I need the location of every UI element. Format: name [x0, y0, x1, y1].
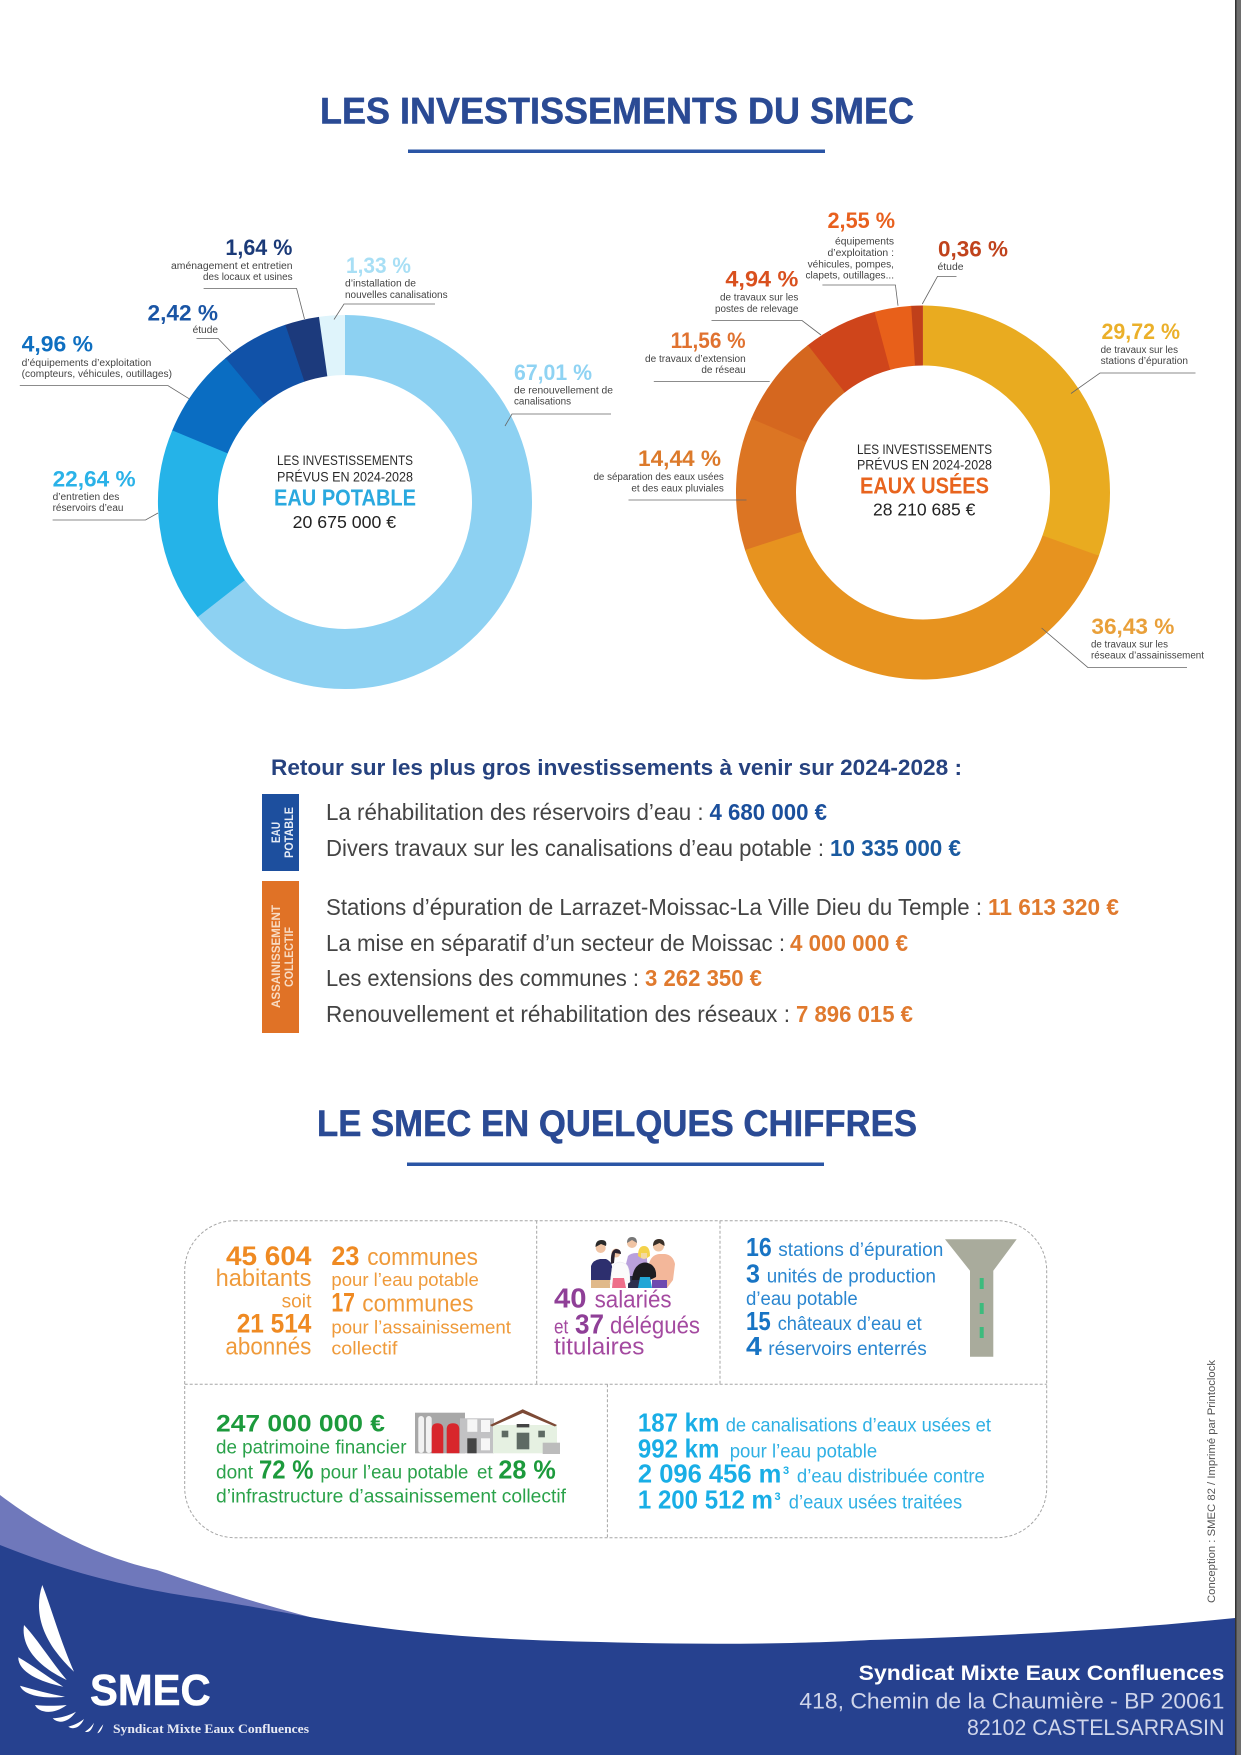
icon: route: [945, 1239, 1017, 1357]
logo: SMEC: Syndicat Mixte Eaux Confluences: [113, 1721, 309, 1736]
chart: donut eaux usées: [703, 272, 1143, 713]
label: 11,56 %: de travaux d’extension: [645, 354, 746, 365]
icon: usine et maison: [415, 1409, 560, 1454]
donut centre text: eaux usées: LES INVESTISSEMENTS: [857, 442, 992, 457]
label: 67,01 %: [505, 360, 613, 426]
badge: eau potable: EAU: [269, 822, 283, 843]
logo: SMEC: SMEC: [90, 1666, 211, 1715]
footer wave: light band: [0, 1495, 345, 1640]
label: 22,64 %: [53, 466, 158, 520]
stat: communes: collectif: [331, 1337, 398, 1358]
stat: habitants et abonnés: abonnés: [225, 1333, 311, 1360]
list: eau potable: Divers travaux sur les canalisations d’eau potable :: [326, 835, 824, 861]
label: 29,72 %: [1071, 319, 1196, 394]
title: le SMEC en quelques chiffres: [317, 1103, 917, 1166]
label: 29,72 %: stations d’épuration: [1101, 356, 1188, 367]
stat: canalisations et volumes: 1 200 512 m: [638, 1484, 773, 1514]
donut centre text: eaux usées: [857, 442, 992, 520]
label: 2,55 %: véhicules, pompes,: [808, 260, 894, 270]
badge: assainissement collectif: COLLECTIF: [282, 927, 296, 987]
label: 4,96 %: 4,96 %: [22, 332, 93, 356]
label: 1,64 %: aménagement et entretien: [171, 261, 293, 272]
label: 1,33 %: 1,33 %: [346, 253, 411, 278]
label: 67,01 %: canalisations: [514, 396, 571, 408]
label: 0,36 %: [922, 236, 1008, 304]
footer address: [799, 1662, 1224, 1740]
stat: communes: 17: [331, 1288, 355, 1318]
label: 14,44 %: 14,44 %: [638, 446, 721, 471]
label: 67,01 %: de renouvellement de: [514, 386, 613, 396]
donut centre text: eaux usées: PRÉVUS EN 2024-2028: [857, 457, 992, 472]
stat: canalisations et volumes: 2 096 456 m: [638, 1458, 781, 1488]
label: 2,55 %: [806, 208, 898, 306]
label: 1,64 %: [171, 235, 304, 319]
label: 2,55 %: clapets, outillages...: [806, 270, 894, 282]
stat: salariés et délégués: 37: [575, 1308, 604, 1339]
label: 36,43 %: réseaux d’assainissement: [1091, 651, 1204, 662]
label: 4,96 %: d’équipements d’exploitation: [22, 358, 151, 369]
stat: patrimoine financier: 247 000 000 €: [216, 1411, 385, 1438]
stat: habitants et abonnés: soit: [282, 1291, 312, 1312]
stat: équipements stations: 16: [746, 1232, 772, 1262]
list: assainissement collectif: 7 896 015 €: [796, 1001, 913, 1027]
stat: patrimoine financier: [216, 1411, 567, 1508]
stat: patrimoine financier: et: [477, 1462, 493, 1483]
footer address: 418, Chemin de la Chaumière - BP 20061: [799, 1688, 1224, 1713]
stat: patrimoine financier: dont: [216, 1462, 254, 1483]
list: assainissement collectif: 4 000 000 €: [790, 930, 908, 956]
label: 2,55 %: 2,55 %: [828, 208, 895, 233]
stat: salariés et délégués: salariés: [595, 1287, 672, 1314]
footer address: Syndicat Mixte Eaux Confluences: [859, 1662, 1224, 1685]
stat: canalisations et volumes: de canalisations d’eaux usées et: [726, 1416, 992, 1437]
stat: équipements stations: d’eau potable: [746, 1289, 858, 1310]
label: 14,44 %: et des eaux pluviales: [631, 484, 724, 495]
label: 2,55 %: d’exploitation :: [828, 248, 894, 259]
donut centre text: eau potable: 20 675 000 €: [293, 512, 396, 532]
label: 36,43 %: de travaux sur les: [1091, 640, 1168, 651]
donut centre text: eau potable: LES INVESTISSEMENTS: [277, 453, 413, 468]
chart: donut eau potable: [124, 281, 566, 723]
donut centre text: eau potable: [274, 453, 416, 532]
label: 1,64 %: des locaux et usines: [203, 272, 293, 283]
stat: communes: [331, 1241, 511, 1358]
list: assainissement collectif: 11 613 320 €: [988, 894, 1119, 920]
stat: équipements stations: châteaux d’eau et: [778, 1314, 922, 1335]
title: le SMEC en quelques chiffres: LE SMEC EN QUELQUES CHIFFRES: [317, 1103, 917, 1144]
stat: patrimoine financier: d’infrastructure d’assainissement collectif: [216, 1487, 567, 1508]
stat: communes: communes: [367, 1244, 478, 1271]
stat: salariés et délégués: 40: [554, 1283, 586, 1314]
stat: canalisations et volumes: [638, 1408, 992, 1514]
scan edge: [1235, 0, 1241, 1755]
stat: équipements stations: 15: [746, 1306, 771, 1336]
list: eau potable: 4 680 000 €: [710, 799, 827, 825]
stat: habitants et abonnés: [216, 1241, 312, 1360]
stat: canalisations et volumes: pour l’eau potable: [730, 1442, 877, 1463]
title: les investissements du SMEC: [320, 90, 914, 153]
donut centre text: eaux usées: EAUX USÉES: [860, 471, 989, 498]
label: 2,42 %: 2,42 %: [148, 300, 218, 326]
label: 14,44 %: [594, 446, 746, 500]
label: 67,01 %: 67,01 %: [514, 360, 592, 385]
donut centre text: eau potable: EAU POTABLE: [274, 484, 416, 510]
stat: communes: 23: [331, 1241, 359, 1271]
label: 0,36 %: 0,36 %: [938, 236, 1008, 261]
label: 22,64 %: 22,64 %: [53, 466, 136, 492]
label: 1,33 %: [334, 253, 448, 320]
label: 2,42 %: [148, 300, 231, 352]
stat: équipements stations: stations d’épuration: [778, 1240, 943, 1261]
label: 29,72 %: 29,72 %: [1102, 319, 1180, 344]
stat: canalisations et volumes: 992 km: [638, 1434, 719, 1464]
list: eau potable: La réhabilitation des réservoirs d’eau :: [326, 799, 704, 825]
panel: chiffres clés frame: [185, 1221, 1047, 1538]
label: 4,96 %: (compteurs, véhicules, outillages): [22, 369, 172, 380]
stat: salariés et délégués: délégués: [610, 1312, 700, 1339]
list: assainissement collectif: La mise en séparatif d’un secteur de Moissac :: [326, 930, 785, 956]
label: 1,33 %: d’installation de: [345, 279, 416, 290]
stat: canalisations et volumes: d’eaux usées traitées: [789, 1492, 962, 1513]
donut centre text: eaux usées: 28 210 685 €: [873, 500, 976, 520]
credit: conception: Conception : SMEC 82 / Imprimé par Printoclock: [1206, 1359, 1218, 1603]
donut centre text: eau potable: PRÉVUS EN 2024-2028: [277, 469, 413, 484]
stat: habitants et abonnés: habitants: [216, 1265, 311, 1292]
list: assainissement collectif: Stations d’épuration de Larrazet-Moissac-La Ville Dieu du Temple :: [326, 894, 982, 920]
stat: patrimoine financier: 72 %: [259, 1454, 314, 1484]
stat: patrimoine financier: de patrimoine financier: [216, 1437, 407, 1458]
stat: habitants et abonnés: 45 604: [226, 1241, 311, 1271]
stat: équipements stations: 4: [746, 1331, 762, 1361]
stat: communes: communes: [362, 1291, 474, 1318]
label: 11,56 %: 11,56 %: [671, 328, 746, 353]
stat: équipements stations: 3: [746, 1259, 760, 1289]
label: 2,42 %: étude: [193, 325, 218, 336]
badge: eau potable: POTABLE: [282, 807, 296, 858]
stat: canalisations et volumes: 3: [783, 1465, 789, 1477]
stat: patrimoine financier: pour l’eau potable: [320, 1462, 468, 1483]
stat: salariés et délégués: et: [554, 1316, 569, 1338]
stat: équipements stations: réservoirs enterrés: [768, 1339, 927, 1360]
label: 36,43 %: 36,43 %: [1091, 614, 1174, 639]
label: 4,96 %: [20, 332, 189, 399]
label: 4,94 %: 4,94 %: [725, 267, 798, 292]
label: 4,94 %: postes de relevage: [715, 304, 799, 315]
label: 11,56 %: [645, 328, 770, 381]
list: eau potable: [326, 799, 961, 861]
stat: équipements stations: [746, 1232, 943, 1361]
footer address: 82102 CASTELSARRASIN: [967, 1715, 1224, 1740]
list: assainissement collectif: [326, 894, 1119, 1027]
footer: dark band: [0, 1545, 1235, 1755]
label: 1,33 %: nouvelles canalisations: [345, 290, 448, 301]
stat: salariés et délégués: [554, 1283, 700, 1360]
label: 22,64 %: réservoirs d’eau: [53, 503, 123, 514]
badge: assainissement collectif: ASSAINISSEMENT: [269, 904, 283, 1008]
label: 22,64 %: d’entretien des: [53, 492, 119, 503]
label: 14,44 %: de séparation des eaux usées: [594, 472, 724, 483]
badge: assainissement collectif: [262, 881, 299, 1033]
list: assainissement collectif: Les extensions des communes :: [326, 965, 639, 991]
label: 11,56 %: de réseau: [701, 365, 746, 376]
list: assainissement collectif: Renouvellement et réhabilitation des réseaux :: [326, 1001, 790, 1027]
stat: canalisations et volumes: d’eau distribuée contre: [797, 1466, 985, 1487]
label: 1,64 %: 1,64 %: [225, 235, 292, 260]
stat: communes: pour l’eau potable: [331, 1269, 479, 1290]
stat: patrimoine financier: 28 %: [498, 1454, 556, 1484]
label: 4,94 %: de travaux sur les: [720, 292, 798, 304]
icon: groupe de personnes: [591, 1237, 675, 1288]
stat: salariés et délégués: titulaires: [554, 1333, 644, 1360]
stat: communes: pour l’assainissement: [331, 1316, 511, 1337]
stat: habitants et abonnés: 21 514: [237, 1308, 311, 1338]
title: les investissements du SMEC: LES INVESTISSEMENTS DU SMEC: [320, 90, 914, 132]
logo: SMEC: [18, 1585, 309, 1736]
stat: canalisations et volumes: 3: [774, 1491, 781, 1503]
label: 4,94 %: [712, 267, 821, 335]
stat: canalisations et volumes: 187 km: [638, 1408, 719, 1438]
label: 2,55 %: équipements: [835, 237, 894, 248]
label: 36,43 %: [1042, 614, 1204, 668]
badge: eau potable: [262, 794, 299, 871]
label: 0,36 %: étude: [938, 262, 964, 273]
stat: équipements stations: unités de production: [767, 1267, 936, 1288]
list: assainissement collectif: 3 262 350 €: [645, 965, 762, 991]
heading: retour sur les investissements: Retour sur les plus gros investissements à venir sur 2024-2028 :: [271, 755, 962, 780]
icon: aile: [18, 1585, 103, 1733]
list: eau potable: 10 335 000 €: [830, 835, 961, 861]
label: 29,72 %: de travaux sur les: [1101, 345, 1178, 356]
